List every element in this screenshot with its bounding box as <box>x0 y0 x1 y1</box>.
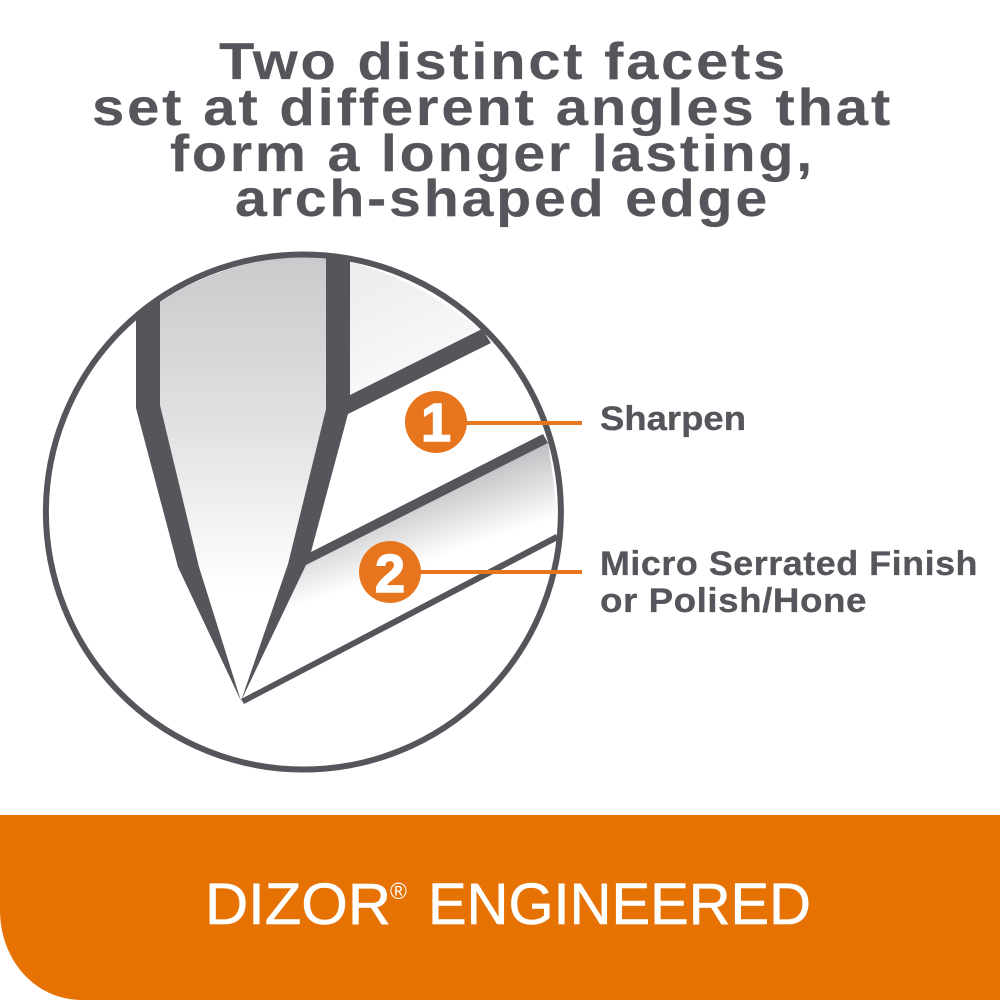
title: form a longer lasting, <box>170 125 815 183</box>
callout 2 <box>359 541 582 604</box>
circle outline <box>46 254 561 770</box>
footer text: DIZOR <box>205 872 391 937</box>
orange footer band <box>0 815 1000 1000</box>
footer text: ® <box>390 878 407 904</box>
callout 1: 1 <box>421 393 451 453</box>
label: micro serrated finish or polish/hone: Micro Serrated Finish <box>600 545 978 583</box>
label: micro serrated finish or polish/hone: or Polish/Hone <box>600 582 867 620</box>
label: sharpen: Sharpen <box>600 400 746 438</box>
right blade edge <box>241 254 548 701</box>
footer text: ENGINEERED <box>428 872 811 937</box>
blade face gradient <box>160 257 326 701</box>
title: arch-shaped edge <box>235 170 770 228</box>
lower edge line <box>241 534 558 704</box>
title: set at different angles that <box>92 79 893 137</box>
left blade edge <box>136 298 241 701</box>
title: Two distinct facets <box>219 33 788 91</box>
footer text <box>205 872 811 937</box>
callout 1 <box>405 391 582 453</box>
callout 2: 2 <box>375 544 405 604</box>
title <box>92 33 893 228</box>
knife edge diagram <box>46 254 561 770</box>
label: micro serrated finish or polish/hone <box>600 545 978 620</box>
upper right facet <box>350 262 480 395</box>
facet 2 gradient <box>241 443 557 701</box>
